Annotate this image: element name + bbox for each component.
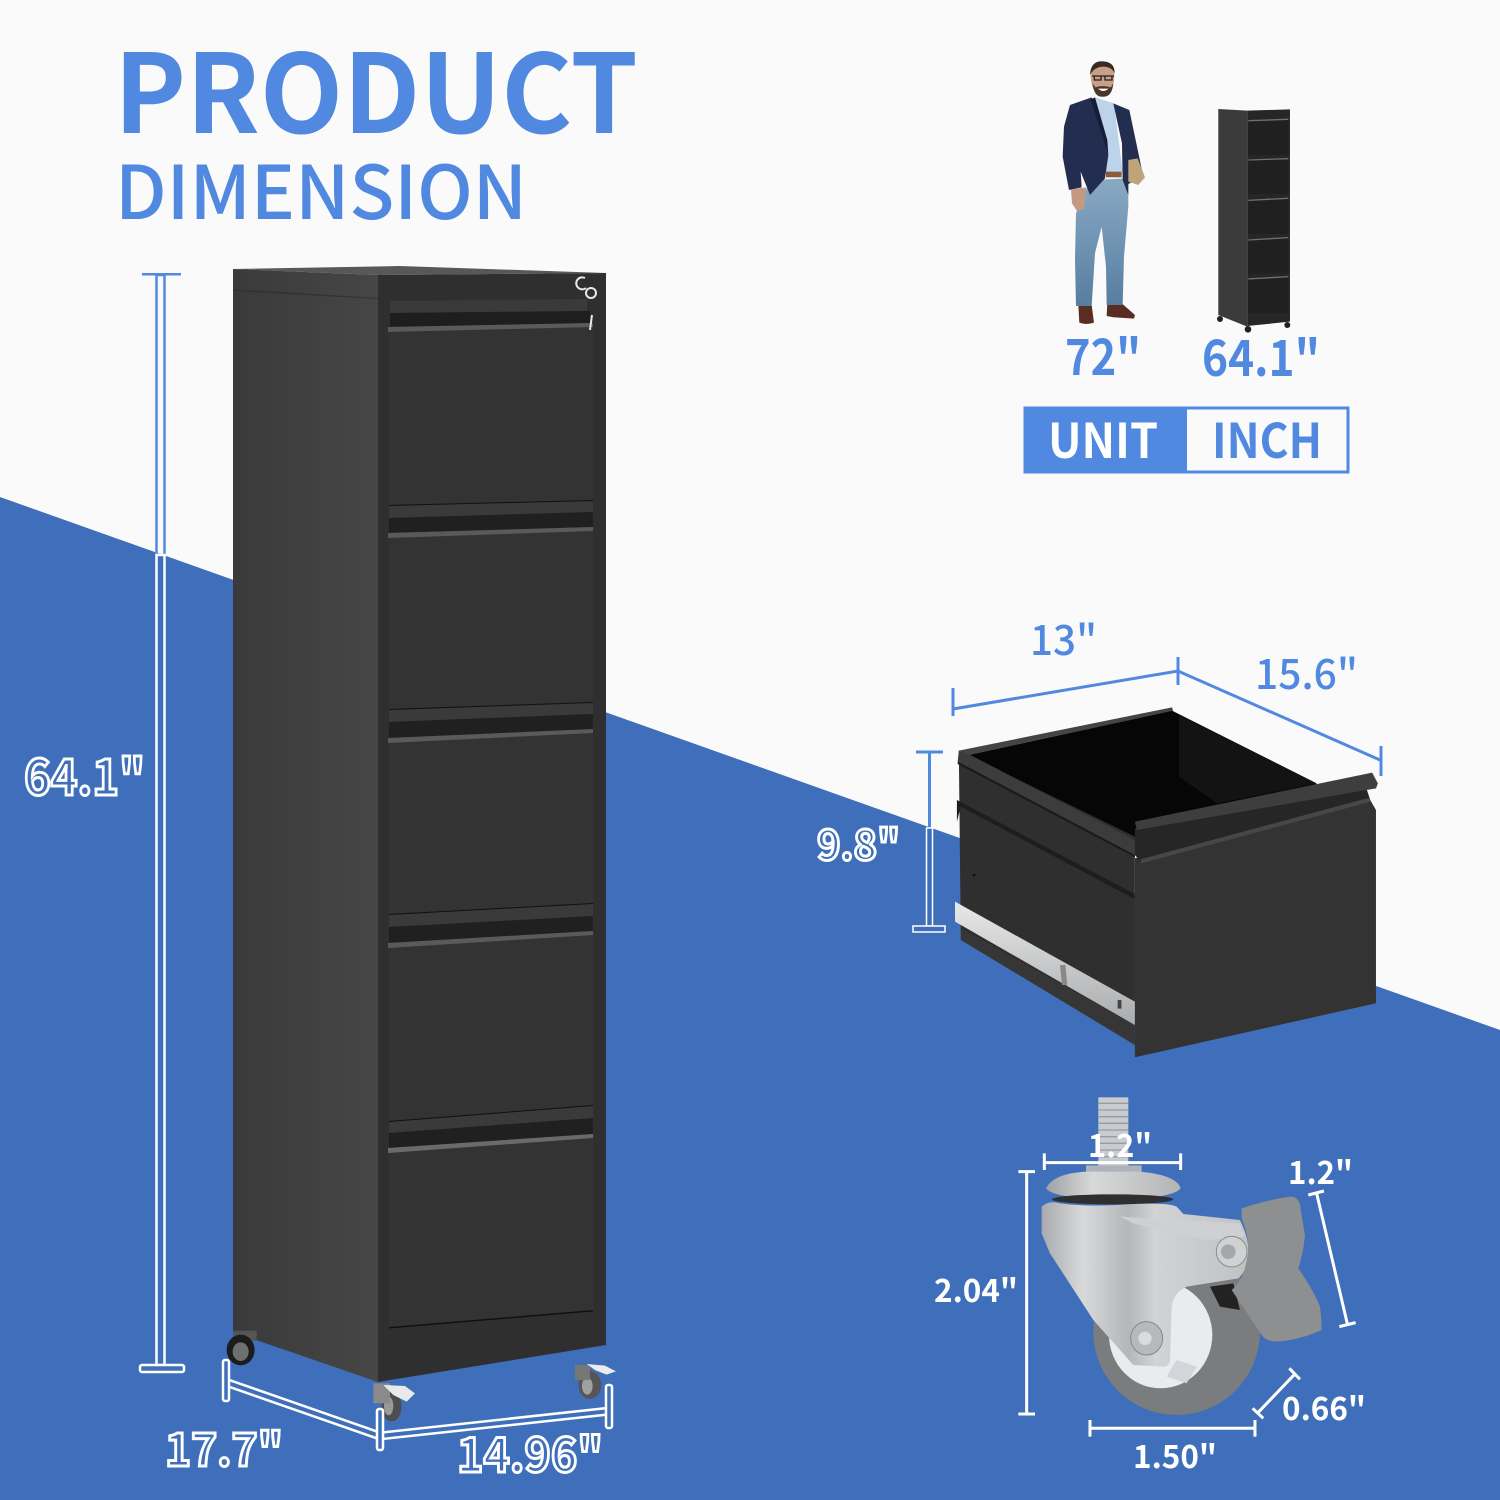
wheel tyre	[1093, 1248, 1260, 1415]
drawer height label: 9.8"	[817, 812, 900, 873]
caster front middle	[373, 1383, 415, 1421]
title	[114, 8, 638, 241]
drawer inside	[968, 711, 1317, 843]
top rail	[390, 299, 587, 313]
caster dimension lines	[1018, 1153, 1356, 1437]
filing cabinet	[227, 266, 616, 1421]
back rim	[959, 707, 1173, 755]
lapel	[1091, 97, 1108, 155]
depth label: 17.7"	[165, 1414, 283, 1480]
small cabinet for scale	[1217, 109, 1290, 333]
axle bolt	[1131, 1322, 1163, 1355]
man height label: 72"	[1065, 318, 1141, 390]
hair	[1090, 61, 1115, 75]
height dimension bracket	[140, 273, 184, 1372]
front lip	[1135, 788, 1370, 862]
drawer depth label: 15.6"	[1255, 641, 1358, 702]
drawer 4	[388, 904, 593, 1122]
shoes	[1078, 303, 1135, 324]
neck and head	[1091, 63, 1114, 97]
drawer width label: 13"	[1030, 607, 1097, 668]
bolt width label: 1.2"	[1088, 1121, 1152, 1167]
caster labels	[934, 1121, 1366, 1478]
small handles	[1248, 119, 1288, 279]
open drawer	[955, 707, 1378, 1057]
title line: dimension: DIMENSION	[115, 134, 527, 241]
small casters	[1217, 316, 1290, 333]
small drawers	[1248, 120, 1288, 313]
lock and keys	[576, 277, 596, 330]
shirt	[1095, 97, 1123, 173]
jacket	[1063, 97, 1143, 195]
inch text: INCH	[1212, 402, 1322, 472]
drawer front	[1135, 800, 1376, 1057]
side hole	[973, 874, 976, 876]
wheel hub	[1109, 1282, 1212, 1388]
belt	[1106, 172, 1122, 177]
smile	[1098, 89, 1109, 91]
glasses	[1092, 76, 1114, 80]
drawer side wall	[959, 751, 1135, 1025]
rail slot	[1118, 1000, 1121, 1009]
caster back left	[227, 1331, 257, 1365]
caster wheel	[1042, 1097, 1322, 1415]
hand	[1071, 187, 1086, 212]
wheel width label: 0.66"	[1282, 1384, 1366, 1430]
wheel diameter label: 1.50"	[1133, 1432, 1217, 1478]
handle rim	[1135, 773, 1378, 830]
casters	[227, 1331, 616, 1421]
lever length label: 1.2"	[1288, 1148, 1353, 1194]
slide rail	[955, 902, 1135, 1025]
cabinet height label: 64.1"	[1202, 319, 1320, 391]
jeans	[1075, 178, 1128, 306]
mounting plate	[1046, 1172, 1181, 1200]
books	[1128, 158, 1145, 185]
nut	[1086, 1165, 1142, 1181]
dark wheel gap	[1210, 1283, 1240, 1310]
caster front right	[575, 1364, 616, 1399]
drawer 3	[388, 703, 593, 916]
rail clip	[1060, 965, 1067, 985]
bracket rib	[1120, 1217, 1245, 1240]
man for scale	[1063, 61, 1145, 324]
title line: product: PRODUCT	[114, 8, 638, 165]
cabinet side panel	[233, 269, 378, 1382]
beard	[1093, 83, 1113, 97]
height label: 64.1"	[24, 738, 145, 810]
drawer height bracket	[913, 752, 945, 932]
bottom strip	[961, 928, 1135, 1045]
drawer 2	[388, 501, 593, 710]
drawer 5	[388, 1106, 593, 1328]
cabinet top	[233, 266, 606, 275]
base dimension brackets	[223, 1360, 612, 1450]
width label: 14.96"	[457, 1416, 603, 1486]
drawer 1	[388, 323, 593, 506]
inner right wall	[1179, 715, 1317, 803]
side step line	[957, 800, 1135, 899]
lever	[1232, 1197, 1322, 1342]
cabinet front frame	[378, 273, 606, 1382]
bracket	[1042, 1202, 1248, 1367]
side rim	[958, 751, 1135, 855]
unit text: UNIT	[1048, 402, 1158, 472]
blue diagonal panel	[0, 497, 1500, 1500]
unit badge	[1024, 402, 1348, 473]
lever pivot	[1216, 1236, 1247, 1267]
small cabinet body	[1218, 109, 1247, 327]
drawer dimension lines	[953, 657, 1381, 776]
threaded bolt	[1098, 1097, 1128, 1166]
caster height label: 2.04"	[934, 1266, 1018, 1312]
